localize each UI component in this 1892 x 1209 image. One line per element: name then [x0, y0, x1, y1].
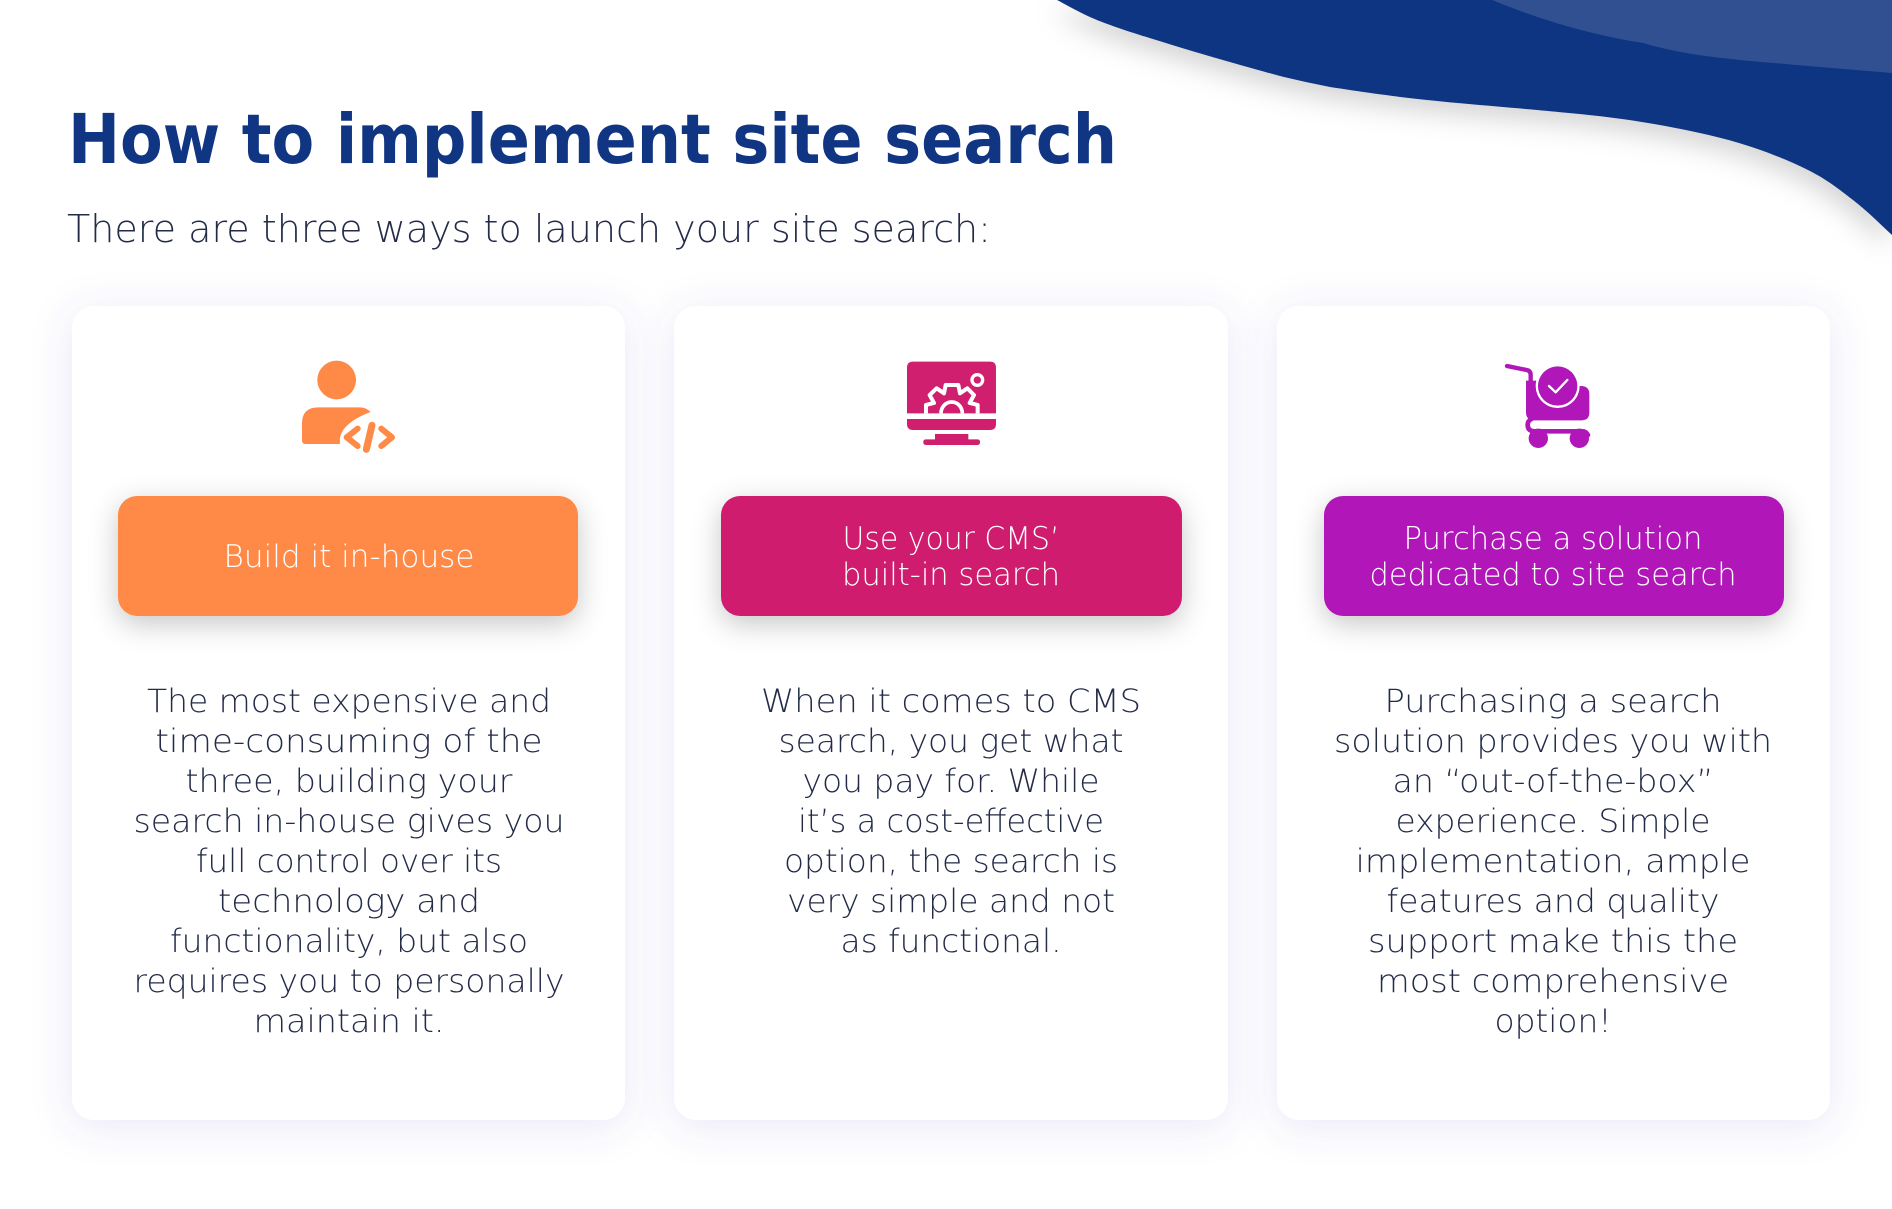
panel: build it in-house — [72, 306, 625, 1120]
text block: use your CMS — [761, 682, 1141, 960]
text block: build it in-house: requires you to personally — [134, 962, 564, 1000]
button: use your CMS: Use your CMS’ — [842, 521, 1060, 557]
button: use your CMS — [721, 496, 1182, 616]
text block: use your CMS: as functional. — [840, 922, 1062, 960]
text block: purchase a solution: solution provides you with — [1334, 722, 1772, 760]
button: build it in-house: Build it in-house — [224, 539, 474, 575]
button: build it in-house — [118, 496, 578, 616]
text block: build it in-house: time-consuming of the — [156, 722, 542, 760]
button: use your CMS: built-in search — [842, 557, 1060, 593]
panel: use your CMS built-in search — [674, 306, 1228, 1120]
text block: purchase a solution — [1334, 682, 1772, 1040]
text block: purchase a solution: option! — [1494, 1002, 1612, 1040]
text block: use your CMS: very simple and not — [787, 882, 1115, 920]
text block: purchase a solution: features and quality — [1386, 882, 1720, 920]
text block: build it in-house: maintain it. — [254, 1002, 444, 1040]
text block: use your CMS: it’s a cost-effective — [798, 802, 1104, 840]
text block: build it in-house: The most expensive and — [147, 682, 551, 720]
button: purchase a solution — [1324, 496, 1784, 616]
text block: use your CMS: option, the search is — [784, 842, 1118, 880]
text block: purchase a solution: support make this the — [1368, 922, 1738, 960]
text block: build it in-house: search in-house gives you — [134, 802, 564, 840]
text block: purchase a solution: implementation, ample — [1356, 842, 1750, 880]
text block: build it in-house: full control over its — [196, 842, 502, 880]
text block: build it in-house: three, building your — [186, 762, 513, 800]
text block: use your CMS: search, you get what — [778, 722, 1124, 760]
icon: shopping cart with check — [1507, 364, 1589, 448]
text block: build it in-house — [134, 682, 564, 1040]
text block: purchase a solution: experience. Simple — [1396, 802, 1710, 840]
text block: use your CMS: When it comes to CMS — [761, 682, 1141, 720]
title: How to implement site search — [68, 100, 1117, 180]
panel: purchase a solution — [1277, 306, 1830, 1120]
button: purchase a solution: Purchase a solution — [1404, 521, 1702, 557]
text block: build it in-house: technology and — [218, 882, 480, 920]
subtitle: There are three ways to launch your site search: — [67, 207, 991, 251]
decorative wave: top right — [1057, 0, 1892, 235]
button: purchase a solution: dedicated to site search — [1370, 557, 1736, 593]
text block: purchase a solution: an “out-of-the-box” — [1392, 762, 1714, 800]
text block: purchase a solution: most comprehensive — [1377, 962, 1729, 1000]
text block: purchase a solution: Purchasing a search — [1384, 682, 1722, 720]
text block: build it in-house: functionality, but also — [170, 922, 528, 960]
icon: monitor with gear — [907, 362, 996, 445]
text block: use your CMS: you pay for. While — [802, 762, 1100, 800]
icon: developer person with code brackets — [302, 361, 392, 449]
